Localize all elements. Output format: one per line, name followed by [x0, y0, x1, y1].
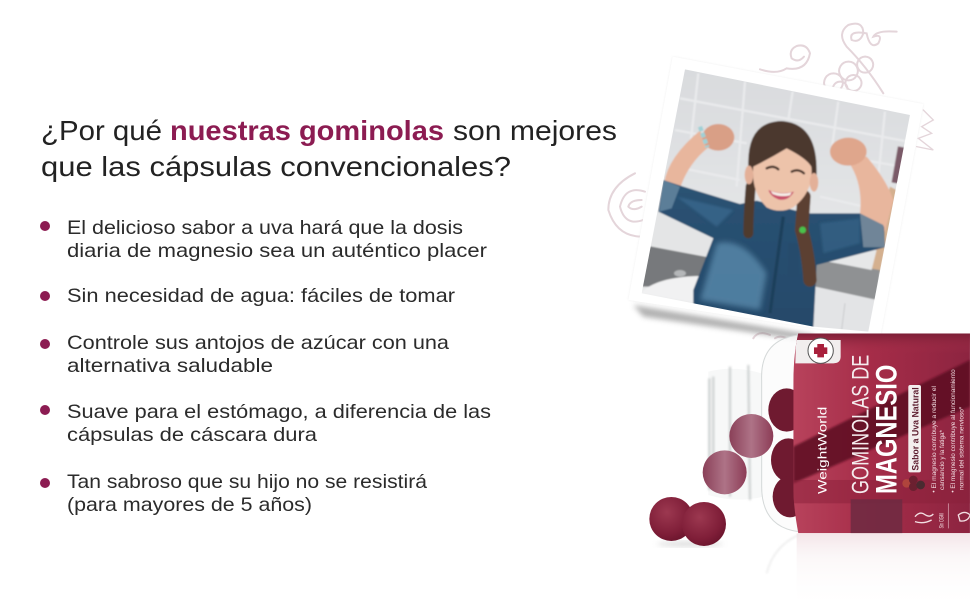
diet icons: Sin OGM	[938, 513, 945, 528]
photo card	[633, 70, 910, 340]
bullet 1	[40, 217, 488, 262]
seal badge	[795, 338, 841, 363]
white frame	[628, 57, 923, 338]
title: son mejores	[453, 115, 617, 146]
left fist	[702, 124, 734, 151]
gummies inside bottle	[768, 388, 807, 517]
gummy in neck upper	[729, 414, 773, 458]
grapes	[902, 476, 925, 491]
denim shirt	[658, 180, 885, 328]
label bullets: normal del sistema nervioso*	[958, 406, 965, 490]
card shadow	[633, 305, 813, 342]
photo of smiling girl flexing her arms	[642, 70, 910, 332]
brand name: WeightWorld	[816, 406, 830, 494]
bullet 4: Suave para el estómago, a diferencia de las	[67, 401, 491, 423]
bullet 4: cápsulas de cáscara dura	[67, 424, 317, 446]
bottle with gummies	[649, 333, 970, 547]
bottle reflection	[767, 533, 970, 600]
smile	[768, 190, 794, 200]
bullet 4	[40, 401, 491, 446]
grape vine decorations	[608, 24, 933, 338]
bullet 5	[40, 471, 427, 516]
bullet 5: Tan sabroso que su hijo no se resistirá	[67, 471, 427, 493]
title: que las cápsulas convencionales?	[41, 151, 511, 182]
gummy in neck lower	[703, 450, 747, 494]
title	[41, 115, 617, 182]
diet icons	[915, 503, 970, 528]
bullet 5: (para mayores de 5 años)	[67, 494, 312, 516]
right fist	[830, 138, 867, 166]
label bullets	[931, 369, 965, 493]
label bullets: • El magnesio contribuye al funcionamiento	[950, 369, 957, 493]
label bullets: cansancio y la fatiga*	[939, 429, 946, 490]
gummy outside right	[682, 502, 726, 546]
label bullets: • El magnesio contribuye a reducir el	[931, 386, 938, 493]
bullet 3: Controle sus antojos de azúcar con una	[67, 332, 449, 354]
glass bottle neck	[708, 335, 798, 532]
left arm	[664, 131, 708, 188]
bullet list	[40, 217, 491, 516]
green hair tie	[799, 227, 806, 233]
soft frame glow	[628, 57, 923, 338]
gummy outside left	[649, 497, 693, 541]
right arm	[848, 157, 893, 232]
bullet 2: Sin necesidad de agua: fáciles de tomar	[67, 285, 456, 307]
product name: GOMINOLAS DE	[847, 355, 874, 494]
bullet 1: El delicioso sabor a uva hará que la dosis	[67, 217, 463, 239]
bullet 1: diaria de magnesio sea un auténtico placer	[67, 240, 488, 262]
title: ¿Por qué	[41, 115, 162, 146]
bullet 3	[40, 332, 449, 377]
gummy shadow	[657, 541, 723, 547]
bullet 3: alternativa saludable	[67, 355, 273, 377]
face	[753, 148, 812, 211]
braids	[748, 187, 751, 233]
magnesio: MAGNESIO	[871, 365, 904, 494]
title: nuestras gominolas	[170, 115, 444, 146]
hair	[747, 121, 817, 183]
flavour pill: Sabor a Uva Natural	[910, 387, 920, 471]
product label	[792, 333, 970, 533]
